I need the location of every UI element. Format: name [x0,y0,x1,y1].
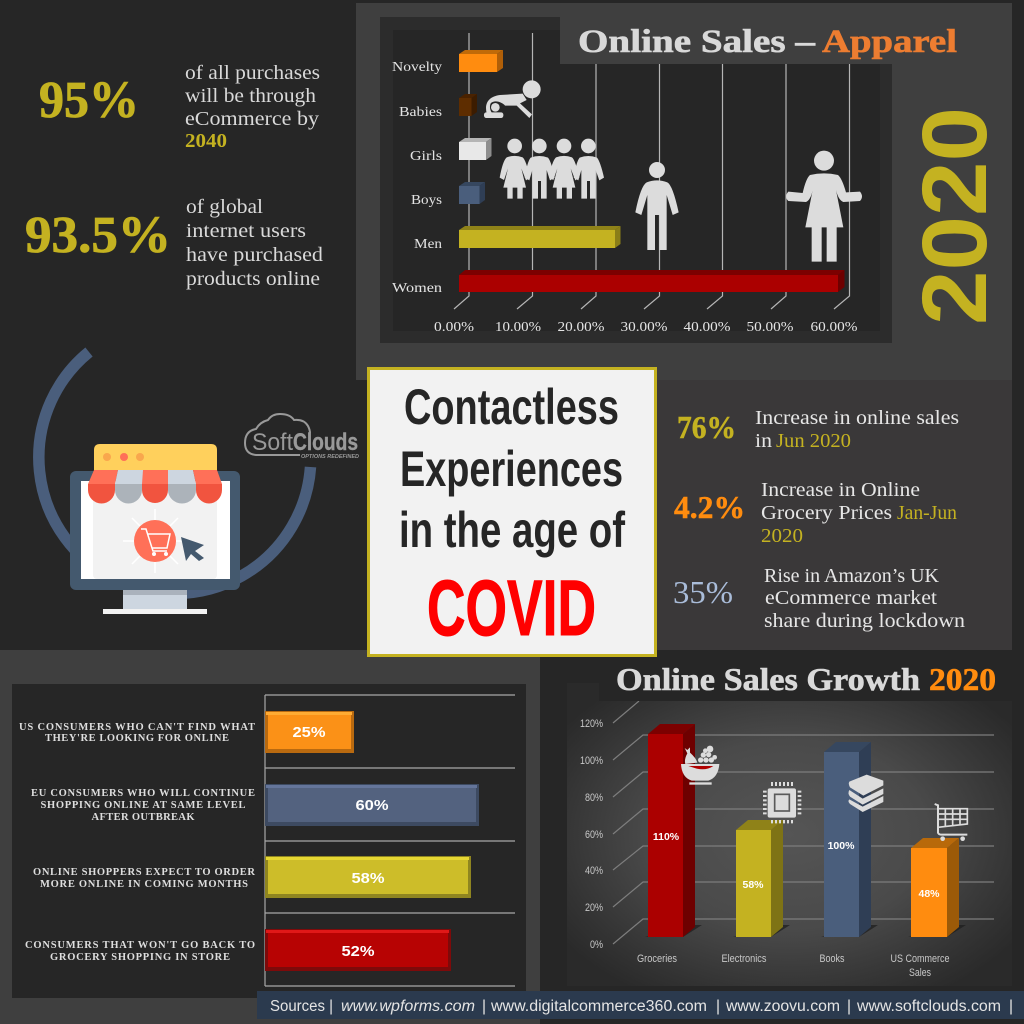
bar: 60 percent [265,784,479,826]
panel: apparel chart [380,17,957,343]
panel: consumer survey chart [12,684,526,998]
bar: 52 percent [265,929,451,971]
icon: microchip [763,782,801,823]
stat: 95 percent: 95% [39,72,139,129]
footer: sources: www.softclouds.com [856,998,1001,1015]
icon: cursor [181,537,204,561]
logo: SoftClouds: Soft [252,429,293,456]
survey labels: GROCERY SHOPPING IN STORE [50,952,230,963]
bar: women [459,270,844,292]
panel: consumer survey background [0,650,540,1024]
text: grocery prices [761,479,957,547]
axis labels: 50.00% [746,320,794,335]
text: purchases through eCommerce: 2040 [185,130,227,152]
bar: novelty [459,50,503,72]
chart title: Online Sales Growth 2020 [599,661,1024,701]
category labels: Groceries [637,953,677,965]
text: global internet users: internet users [186,220,306,242]
icon: woman [786,151,862,262]
chart title: Online Sales Apparel: Apparel [822,24,957,60]
text: Amazon market share: eCommerce market [765,587,937,609]
bar: US commerce sales: 48% [918,888,940,900]
survey labels: SHOPPING ONLINE AT SAME LEVEL [40,800,246,811]
footer: sources: www.digitalcommerce360.com [490,998,707,1015]
bar: 58 percent: 58% [352,870,384,887]
stat: 4.2 percent: 4.2% [674,489,745,525]
axis labels: 80% [585,792,603,804]
stat: 35 percent: 35% [673,574,733,610]
chart title: Online Sales Growth 2020: Online Sales Growth [616,661,920,697]
text: increase in online sales: in [755,430,772,452]
year label 2020: 2020 [904,107,1006,325]
stat: 93.5 percent: 93.5% [25,207,171,264]
bar: books: 100% [828,840,855,852]
center title card: COVID [427,563,596,652]
category labels: Sales [909,967,931,979]
survey labels: EU CONSUMERS WHO WILL CONTINUE [31,788,255,799]
axis labels [434,320,858,335]
center title card [368,368,656,656]
category labels: Books [820,953,845,965]
axis labels: 40.00% [684,320,731,335]
panel: online sales apparel background [356,3,1012,380]
axis labels: 60.00% [810,320,858,335]
category labels [392,60,442,296]
axis labels: 0% [590,939,603,951]
category labels: US Commerce [890,953,950,965]
text: grocery prices: 2020 [761,525,803,547]
bar: 60 percent: 60% [356,797,388,814]
axis labels: 20.00% [558,320,605,335]
chart title: Online Sales Apparel [560,17,957,64]
icon: stack of books [848,775,883,812]
stat: 76 percent: 76% [677,409,736,445]
axis labels [580,718,603,951]
survey labels [19,722,255,963]
text: Amazon market share: share during lockdown [764,610,965,632]
footer: sources [257,991,1024,1019]
survey labels: ONLINE SHOPPERS EXPECT TO ORDER [33,867,255,878]
bar: boys [459,182,485,204]
axis labels: 10.00% [495,320,541,335]
survey labels: CONSUMERS THAT WON'T GO BACK TO [25,940,255,951]
text: increase in online sales: Jun 2020 [776,430,851,452]
footer: sources: | [482,998,486,1015]
footer: sources: www.wpforms.com [341,998,475,1015]
text: global internet users: have purchased [186,244,323,266]
text: grocery prices: Increase in Online [761,479,920,501]
bar: 58 percent [265,856,471,898]
text: Amazon market share [764,565,965,632]
text: purchases through eCommerce [185,62,320,152]
icon: children [500,139,604,199]
bar: electronics [733,820,790,937]
text: global internet users: products online [186,268,320,290]
category labels: Babies [399,105,442,120]
center title card: in the age of [399,502,625,558]
panel: monthly stats background [656,380,1012,650]
bar: men [459,226,620,248]
panel: online sales growth chart [567,661,1024,986]
icon: cart button with rays [123,509,187,573]
axis labels: 40% [585,865,603,877]
axis labels: 20% [585,902,603,914]
illustration: online storefront monitor [39,352,311,614]
axis labels: 0.00% [434,320,474,335]
text: purchases through eCommerce: of all purchases [185,62,320,84]
category labels: Novelty [392,60,442,75]
center title card: Experiences [400,441,623,497]
bar: electronics: 58% [742,879,764,891]
category labels: Electronics [722,953,767,965]
text: grocery prices: Jan-Jun [897,502,957,524]
category labels: Men [414,237,442,252]
footer: sources: | [1009,998,1013,1015]
logo: SoftClouds [245,414,359,460]
monitor [70,471,240,614]
text: increase in online sales: Increase in online sales [755,407,959,429]
text: global internet users [186,196,323,290]
survey labels: AFTER OUTBREAK [92,812,195,823]
survey labels: US CONSUMERS WHO CAN'T FIND WHAT [19,722,255,733]
text: grocery prices: Grocery Prices [761,502,892,524]
logo: SoftClouds: Clouds [293,429,358,456]
chart title: Online Sales Growth 2020: 2020 [929,661,996,697]
survey labels: MORE ONLINE IN COMING MONTHS [40,879,248,890]
text: increase in online sales [755,407,959,452]
panel: left headline stats [25,62,323,290]
icon: shopping cart [935,804,967,841]
category labels [637,953,950,979]
survey labels: THEY'RE LOOKING FOR ONLINE [45,733,229,744]
axis labels: 100% [580,755,603,767]
axis labels: 30.00% [620,320,668,335]
bar: girls [459,138,492,160]
text: Amazon market share: Rise in Amazon’s UK [764,565,940,587]
icon: crawling baby [484,80,541,118]
footer: sources: | [847,998,851,1015]
bar: US commerce sales [908,838,966,937]
awning [88,444,222,504]
logo: SoftClouds: OPTIONS REDEFINED [301,454,359,460]
bar: groceries: 110% [653,831,680,843]
footer: sources: www.zoovu.com [725,998,840,1015]
category labels: Women [392,281,442,296]
chart title: Online Sales Apparel: Online Sales – [578,24,816,60]
bar: 25 percent: 25% [292,724,326,741]
bar: groceries [645,724,702,937]
icon: man [635,162,679,250]
footer: sources: | [716,998,720,1015]
footer: sources: Sources | [270,998,333,1015]
bar: babies [459,94,477,116]
axis labels: 60% [585,829,603,841]
text: purchases through eCommerce: eCommerce by [185,108,319,130]
axis labels: 120% [580,718,603,730]
text: global internet users: of global [186,196,263,218]
icon: fruit bowl [681,746,719,785]
text: purchases through eCommerce: will be through [185,85,316,107]
category labels: Boys [411,193,442,208]
bar: 52 percent: 52% [342,943,374,960]
category labels: Girls [410,149,442,164]
panel: right stats [673,407,965,632]
center title card: Contactless [404,379,619,435]
bar: books [821,742,878,937]
bar: 25 percent [265,711,354,753]
